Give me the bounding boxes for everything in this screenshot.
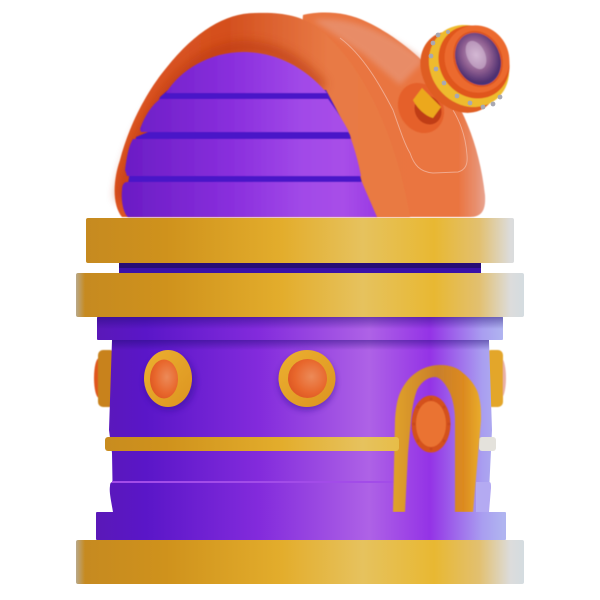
dome front arch xyxy=(115,13,410,217)
upper gold ring xyxy=(86,218,514,263)
body xyxy=(109,340,492,512)
dome xyxy=(115,13,485,217)
lower body band xyxy=(110,482,395,512)
gold ring xyxy=(412,9,526,123)
front housing xyxy=(424,11,524,113)
back housing xyxy=(404,16,514,128)
door porthole xyxy=(412,396,450,452)
shadow band xyxy=(119,263,481,273)
lens xyxy=(447,25,509,93)
upper purple ring xyxy=(97,317,503,340)
band 2 xyxy=(140,99,349,132)
gold belt xyxy=(105,437,399,451)
neck xyxy=(413,88,441,118)
rivets xyxy=(429,30,502,109)
purple dome bands xyxy=(122,52,377,217)
dome rear shell xyxy=(300,13,485,217)
middle window xyxy=(278,350,336,411)
band 1 xyxy=(166,52,327,93)
panel outline xyxy=(340,38,467,173)
gold base xyxy=(76,540,524,584)
band 3 xyxy=(125,139,361,176)
door arch xyxy=(393,365,481,512)
rear shell highlight xyxy=(313,19,425,85)
side window right xyxy=(486,350,506,407)
second gold ring xyxy=(76,273,524,317)
right belt xyxy=(479,437,496,451)
band 4 xyxy=(122,182,377,217)
side window left xyxy=(94,350,115,407)
lower band right xyxy=(476,482,491,512)
telescope xyxy=(389,9,526,142)
socket xyxy=(389,74,453,142)
arch inner shadow xyxy=(122,47,322,200)
purple base xyxy=(96,512,506,540)
left window xyxy=(144,350,196,411)
